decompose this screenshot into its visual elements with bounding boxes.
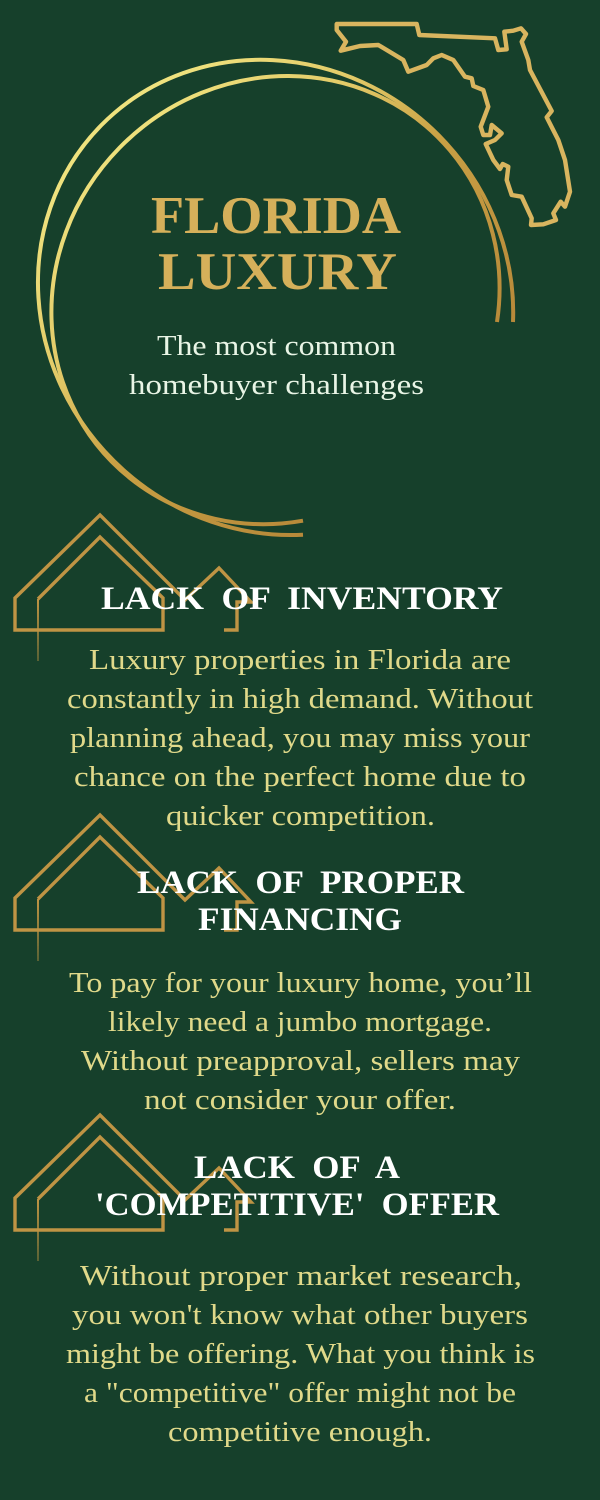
text block: inventory description: Luxury properties in Florida are (89, 645, 511, 676)
text block: competitive offer description: might be offering. What you think is (66, 1339, 535, 1370)
text block: financing description: not consider your offer. (144, 1085, 456, 1116)
heading: lack of inventory: LACK OF INVENTORY (101, 581, 503, 617)
heading: lack of a competitive offer: LACK OF A (194, 1150, 400, 1186)
heading: lack of proper financing: FINANCING (198, 902, 402, 938)
text block: inventory description: constantly in high demand. Without (67, 684, 533, 715)
text block: competitive offer description: Without proper market research, (80, 1261, 522, 1292)
panel: lack of proper financing (15, 815, 532, 1116)
title (151, 187, 401, 301)
text block: inventory description: planning ahead, you may miss your (70, 723, 531, 754)
icon: house outline 1 (15, 515, 251, 661)
text block: inventory description (67, 645, 533, 832)
subtitle: The most common (157, 331, 396, 362)
icon: double gold circle arcs (38, 60, 513, 535)
heading: lack of a competitive offer: 'COMPETITIVE' OFFER (95, 1187, 500, 1223)
panel: lack of inventory (15, 515, 533, 832)
text block: inventory description: quicker competition. (166, 801, 435, 832)
text block: competitive offer description: competitive enough. (168, 1417, 432, 1448)
text block: competitive offer description: you won't know what other buyers (72, 1300, 528, 1331)
text block: competitive offer description (66, 1261, 535, 1448)
subtitle (129, 331, 424, 401)
text block: financing description: likely need a jumbo mortgage. (108, 1007, 492, 1038)
icon: Florida state outline (337, 24, 570, 225)
subtitle: homebuyer challenges (129, 370, 424, 401)
icon: house outline 3 (15, 1115, 251, 1261)
heading: lack of a competitive offer (95, 1150, 500, 1223)
text block: financing description: To pay for your luxury home, you’ll (69, 968, 532, 999)
text block: financing description (69, 968, 532, 1116)
panel: lack of a competitive offer (15, 1115, 535, 1448)
icon: house outline 2 (15, 815, 251, 961)
text block: inventory description: chance on the perfect home due to (74, 762, 526, 793)
text block: competitive offer description: a "competitive" offer might not be (84, 1378, 516, 1409)
title: LUXURY (158, 243, 397, 301)
heading: lack of proper financing: LACK OF PROPER (137, 865, 465, 901)
title: FLORIDA (151, 187, 401, 245)
text block: financing description: Without preapproval, sellers may (81, 1046, 520, 1077)
heading: lack of proper financing (137, 865, 465, 938)
